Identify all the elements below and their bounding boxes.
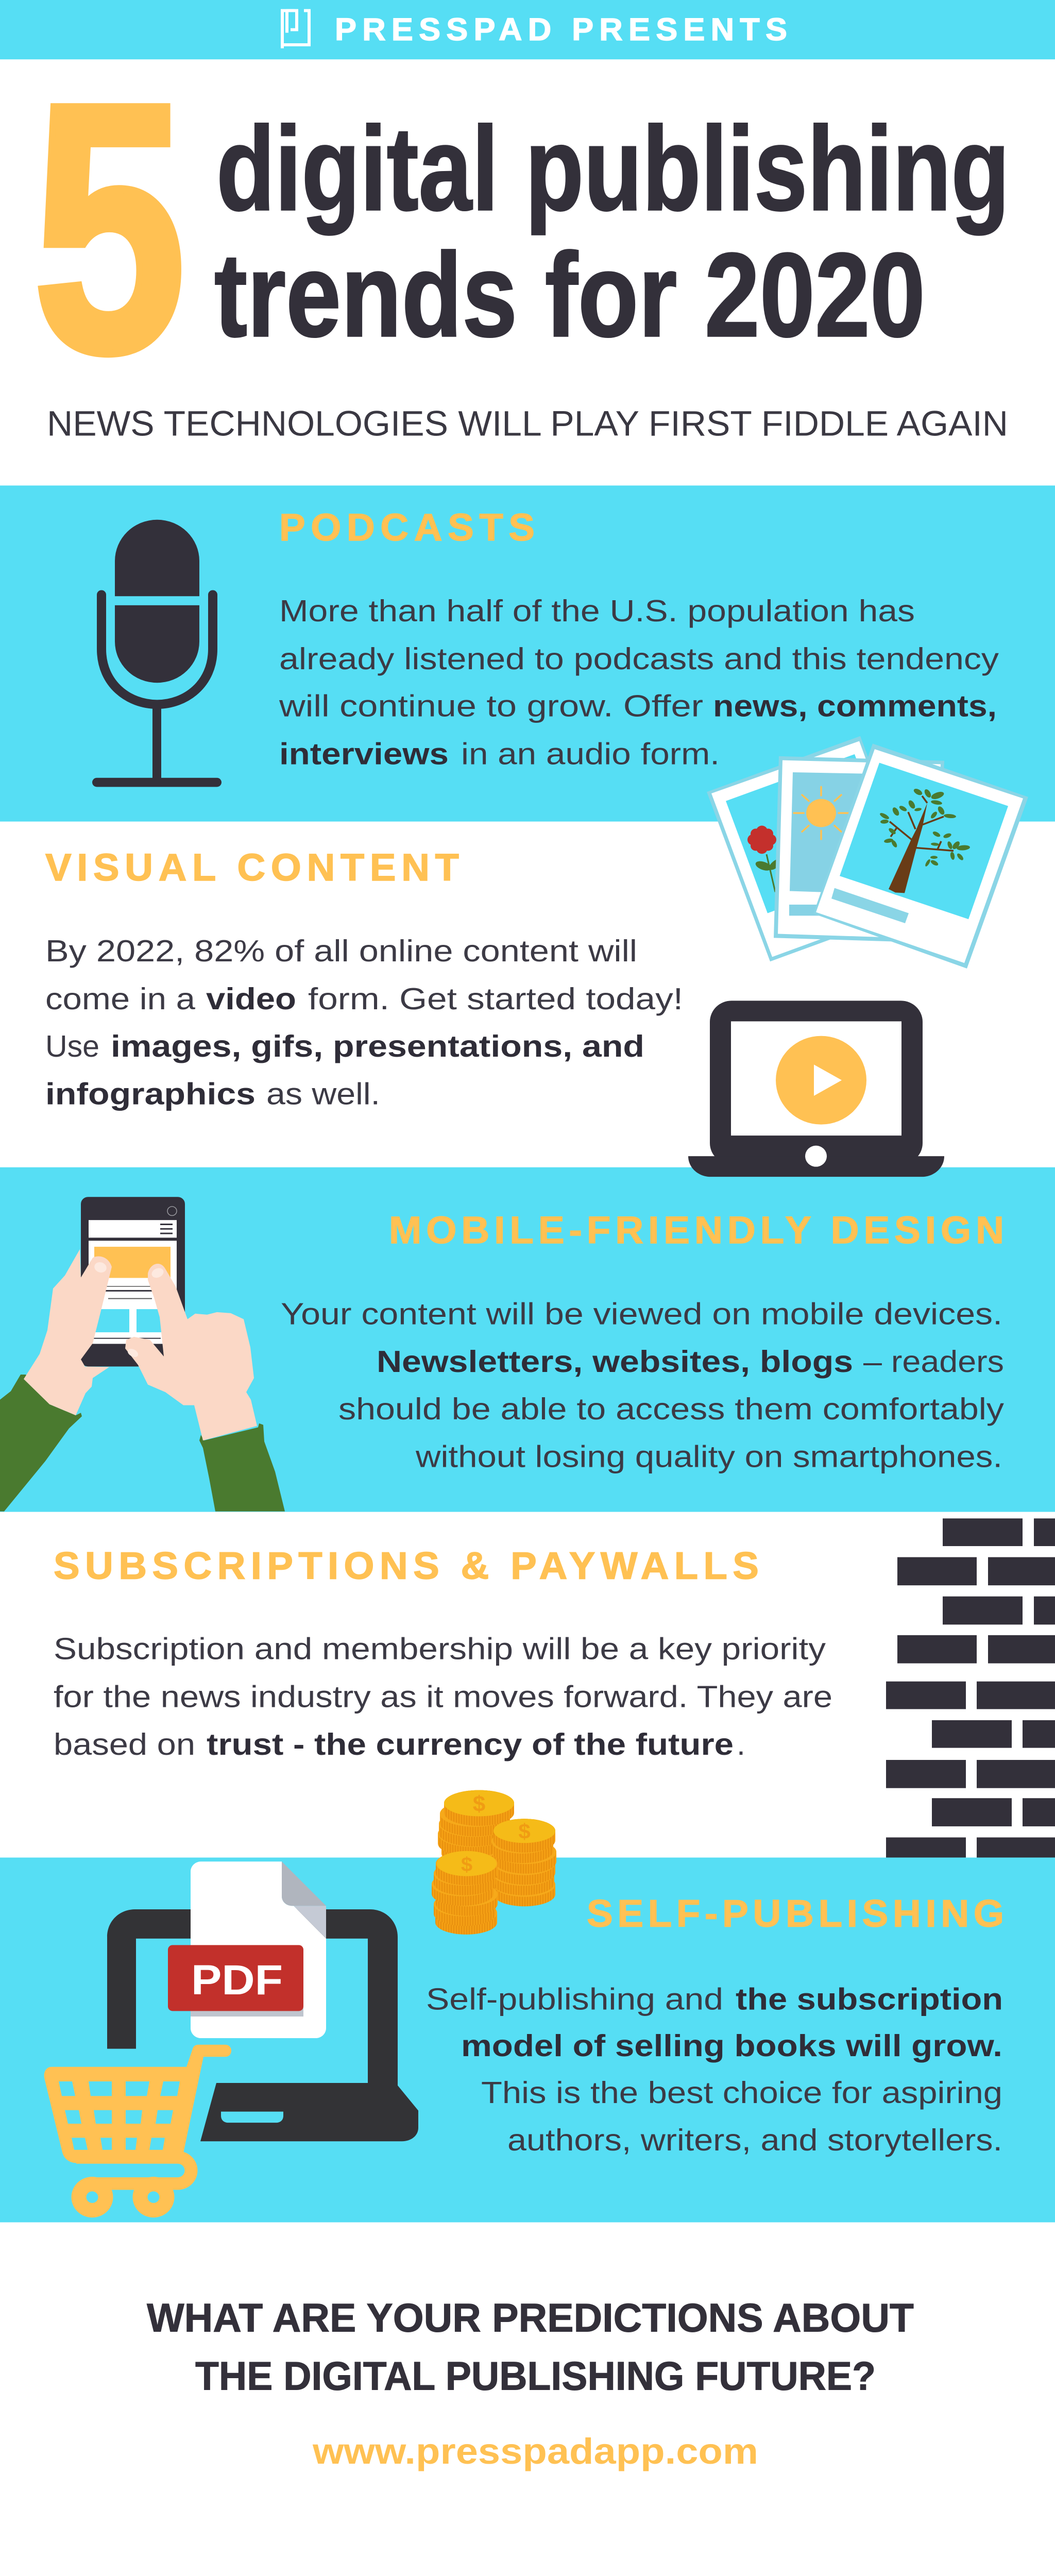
body text: visual content: come in a xyxy=(45,981,196,1016)
body text: visual content: video xyxy=(206,981,296,1016)
body text: visual content: Use xyxy=(45,1028,99,1063)
body text: visual content: By 2022, 82% of all online content will xyxy=(45,934,637,968)
body text: visual content: as well. xyxy=(266,1076,380,1111)
heading: self-publishing: SELF-PUBLISHING xyxy=(587,1892,1004,1935)
body text: mobile-friendly design: – readers xyxy=(863,1344,1004,1379)
left hand xyxy=(24,1249,112,1415)
body text: podcasts: news, comments, xyxy=(713,688,997,723)
body text: subscriptions and paywalls: . xyxy=(737,1727,745,1761)
subtitle: NEWS TECHNOLOGIES WILL PLAY FIRST FIDDLE AGAIN xyxy=(47,403,1008,444)
icon: presspad logo xyxy=(282,11,309,48)
laptop xyxy=(107,1909,418,2141)
body text: self-publishing xyxy=(426,1981,1003,2157)
body text: self-publishing: authors, writers, and storytellers. xyxy=(507,2122,1002,2157)
body text: mobile-friendly design: Your content will be viewed on mobile devices. xyxy=(281,1296,1002,1331)
panel: mobile-friendly design xyxy=(0,1167,1055,1512)
big number 5: 5 xyxy=(33,31,186,426)
body text: visual content: infographics xyxy=(45,1076,256,1111)
body text: mobile-friendly design: Newsletters, websites, blogs xyxy=(377,1344,853,1379)
icon: microphone xyxy=(92,520,222,787)
body text: mobile-friendly design: should be able to access them comfortably xyxy=(338,1392,1005,1426)
closing question line 2: THE DIGITAL PUBLISHING FUTURE? xyxy=(195,2353,876,2398)
panel: self-publishing xyxy=(0,1857,1055,2222)
body text: subscriptions and paywalls: for the news industry as it moves forward. They are xyxy=(54,1679,832,1714)
pdf document: PDF xyxy=(191,1956,283,2004)
body text: visual content xyxy=(45,934,683,1111)
body text: self-publishing: Self-publishing and xyxy=(426,1981,723,2016)
photo: flower xyxy=(707,736,923,961)
body text: podcasts: interviews xyxy=(279,736,449,771)
photo: sun xyxy=(774,756,944,943)
shopping cart xyxy=(44,2045,231,2210)
panel: visual content xyxy=(0,736,1055,1177)
closing call to action xyxy=(147,2295,914,2472)
body text: self-publishing: the subscription xyxy=(736,1981,1003,2016)
panel: podcasts xyxy=(0,485,1055,822)
icon: laptop with play button xyxy=(688,1001,944,1177)
closing question line 1: WHAT ARE YOUR PREDICTIONS ABOUT xyxy=(147,2295,914,2340)
body text: visual content: images, gifs, presentations, and xyxy=(111,1028,644,1063)
body text: podcasts: already listened to podcasts and this tendency xyxy=(279,641,999,676)
icon: laptop with pdf and cart xyxy=(44,1861,418,2210)
body text: podcasts: More than half of the U.S. population has xyxy=(279,594,915,628)
header text: PRESSPAD PRESENTS xyxy=(335,12,787,47)
icon: coin stacks xyxy=(432,1790,556,1935)
fingernails xyxy=(93,1261,165,1359)
icon: brick wall xyxy=(886,1518,1055,1857)
body text: self-publishing: model of selling books will grow. xyxy=(461,2028,1002,2063)
body text: podcasts: in an audio form. xyxy=(461,736,720,771)
body text: mobile-friendly design: without losing quality on smartphones. xyxy=(415,1439,1002,1474)
pdf document xyxy=(168,1861,326,2038)
photo: tree xyxy=(813,743,1028,969)
panel: subscriptions and paywalls xyxy=(0,1512,1055,1935)
heading: podcasts: PODCASTS xyxy=(279,506,535,549)
body text: subscriptions and paywalls xyxy=(54,1631,832,1761)
body text: visual content: form. Get started today! xyxy=(308,981,683,1016)
icon: polaroid photos xyxy=(707,736,1028,969)
icon: hands holding phone xyxy=(0,1197,285,1512)
body text: subscriptions and paywalls: Subscription and membership will be a key priority xyxy=(54,1631,826,1666)
body text: subscriptions and paywalls: trust - the currency of the future xyxy=(207,1727,734,1761)
right hand xyxy=(125,1264,257,1440)
website url: www.presspadapp.com xyxy=(312,2432,758,2472)
body text: podcasts: will continue to grow. Offer xyxy=(279,688,703,723)
heading: subscriptions and paywalls: SUBSCRIPTIONS & PAYWALLS xyxy=(54,1544,759,1587)
body text: subscriptions and paywalls: based on xyxy=(54,1727,195,1761)
heading: mobile-friendly design: MOBILE-FRIENDLY DESIGN xyxy=(389,1209,1004,1251)
icon: coin stacks: $ xyxy=(473,1792,485,1817)
body text: mobile-friendly design xyxy=(281,1296,1005,1474)
body text: podcasts xyxy=(279,594,999,771)
body text: self-publishing: This is the best choice for aspiring xyxy=(481,2075,1002,2110)
header bar xyxy=(0,0,1055,59)
title block xyxy=(33,31,1010,444)
phone xyxy=(81,1197,185,1366)
icon: coin stacks: $ xyxy=(518,1819,531,1843)
icon: coin stacks: $ xyxy=(461,1853,472,1876)
heading: visual content: VISUAL CONTENT xyxy=(45,846,459,889)
sleeves xyxy=(0,1375,82,1512)
